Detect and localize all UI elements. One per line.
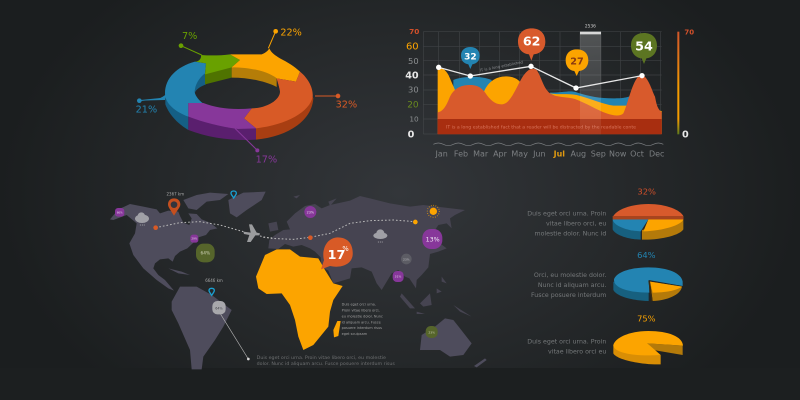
south america [172, 287, 232, 369]
africa note: Proin vitae libero orci, [342, 308, 380, 312]
sun icon [427, 205, 439, 217]
pie 2: Nunc id aliquam arcu. [538, 282, 606, 289]
cloud icon [135, 212, 149, 228]
orange series [438, 68, 662, 134]
grid [423, 32, 662, 134]
new zealand [474, 358, 487, 367]
right labels: 70 [684, 28, 694, 36]
origin dot [153, 225, 158, 230]
pie 3: vitae libero orci eu [548, 349, 606, 356]
column cap [580, 32, 601, 34]
badge 23%: 23% [307, 210, 314, 214]
cloud icon: ••• [139, 224, 145, 228]
bubble 54 [631, 33, 657, 64]
y axis labels [405, 27, 419, 140]
badge 64% grey: 64% [215, 306, 223, 310]
bubble 32 [461, 47, 480, 69]
right labels [682, 28, 694, 141]
australia [420, 318, 472, 357]
month labels: Feb [454, 149, 468, 158]
month labels: Mar [473, 149, 489, 158]
badge 64% grey [212, 301, 226, 314]
pie 3: 75% [637, 314, 656, 324]
donut chart [136, 28, 357, 166]
leader lines [139, 31, 338, 150]
pie 1 [527, 186, 683, 240]
pin blue top [231, 191, 236, 198]
badge 31%: 31% [395, 275, 401, 279]
donut labels: 21% [136, 105, 157, 116]
month labels: Jun [532, 149, 546, 158]
route dots [308, 220, 418, 240]
badge 23% green: 23% [428, 330, 435, 334]
bubble 62: 62 [523, 34, 540, 49]
highlight column [580, 32, 601, 134]
column label: 2536 [585, 23, 596, 29]
badge 64% green [196, 244, 215, 262]
badge 23% green [426, 326, 438, 338]
pie charts [527, 186, 683, 364]
caribbean [168, 268, 190, 275]
y axis labels: 60 [406, 42, 419, 53]
badge 29%: 29% [191, 237, 198, 241]
pie 1: vitae libero orci, eu [546, 221, 606, 228]
flight path [260, 220, 415, 239]
bubble 62 [518, 28, 545, 61]
africa note: Duis eget orci urna. [342, 302, 376, 306]
y axis labels: 40 [405, 70, 419, 81]
bubble 27 [566, 49, 588, 76]
month labels: Dec [649, 149, 664, 158]
africa note [342, 302, 383, 336]
donut labels: 7% [182, 31, 197, 42]
donut labels: 32% [336, 99, 357, 110]
bottom note: Duis eget orci urna. Proin vitae libero orci, eu molestie [257, 355, 386, 361]
cloud icon: ••• [377, 240, 383, 244]
flight path [156, 222, 300, 239]
y axis labels: 50 [408, 56, 419, 66]
month labels: Jan [435, 149, 448, 158]
world map: americas [110, 191, 300, 369]
bottom note [257, 355, 395, 367]
pie 1: molestie dolor. Nunc id [535, 231, 606, 238]
donut labels [136, 28, 357, 166]
pie 2: Fusce posuere interdum [531, 292, 606, 299]
badge 23% [304, 206, 316, 218]
bottom note: dolor. Nunc id aliquam arcu. Fusce posuere interdum risus [257, 361, 395, 367]
arctic islands [183, 193, 228, 210]
badge 64% green: 64% [201, 251, 210, 257]
cloud icon [373, 229, 387, 244]
trend line [436, 64, 645, 91]
month labels [435, 149, 664, 158]
pin blue [209, 288, 214, 295]
month labels: Oct [630, 149, 644, 158]
africa note: id aliquam arcu. Fusce [342, 320, 381, 324]
badge 23% grey [401, 254, 412, 264]
right scale bar [677, 32, 679, 134]
pie 1: 32% [637, 186, 656, 196]
pie 2: 64% [637, 250, 656, 260]
badge 13% [422, 229, 442, 249]
blue series [453, 77, 633, 134]
donut labels: 22% [280, 28, 302, 39]
bubble 32: 32 [464, 52, 477, 62]
bubble 54: 54 [635, 39, 653, 54]
badge 31% [393, 271, 404, 282]
wave axis [433, 143, 663, 146]
pie 3 [527, 314, 683, 364]
badge 29% [190, 235, 198, 243]
badge 66% [115, 208, 124, 217]
callout 17%: 17 [328, 247, 345, 262]
band [438, 119, 662, 134]
month labels: May [511, 149, 528, 158]
area chart [405, 23, 694, 158]
month labels: Jul [553, 149, 565, 158]
plane icon [243, 224, 260, 242]
iceland and uk [268, 195, 337, 232]
madagascar [333, 321, 341, 337]
red series [438, 69, 662, 134]
month labels: Aug [571, 149, 586, 158]
badge 66%: 66% [117, 210, 123, 214]
southeast asia islands [400, 277, 472, 317]
y axis labels: 0 [408, 129, 415, 140]
pin orange [168, 198, 180, 216]
band text: IT is a long established fact that a reader will be distracted by the readable conte [446, 124, 636, 130]
africa [256, 249, 343, 350]
africa note: eu molestie dolor. Nunc [342, 314, 383, 318]
y axis labels: 70 [409, 27, 419, 36]
y axis labels: 30 [408, 85, 419, 95]
line note: IT is a long established [479, 59, 524, 73]
africa note: posuere interdum risus [342, 326, 382, 330]
donut labels: 17% [256, 155, 277, 166]
callout line [221, 314, 250, 360]
pie 2: Orci, eu molestie dolor. [534, 272, 606, 279]
y axis labels: 20 [407, 100, 419, 110]
distance label 2: 6646 km [205, 278, 223, 283]
world map: eurasia and africa [256, 195, 487, 367]
month labels: Apr [493, 149, 508, 158]
eurasia [268, 196, 465, 290]
pie 3: Duis eget orci urna. Proin [527, 339, 606, 346]
month labels: Sep [591, 149, 606, 158]
bubble 27: 27 [570, 56, 584, 67]
pie 2 [531, 250, 683, 301]
right labels: 0 [682, 130, 689, 141]
month labels: Now [609, 149, 627, 158]
north america [110, 204, 217, 291]
distance label: 2367 km [167, 191, 184, 196]
greenland [228, 192, 266, 217]
bottom band [0, 368, 800, 400]
badge 13%: 13% [426, 236, 440, 243]
callout 17%: % [342, 245, 349, 253]
africa note: eget scuipsam [342, 332, 368, 336]
pie 1: Duis eget orci urna. Proin [527, 210, 606, 217]
callout 17% [321, 237, 353, 269]
y axis labels: 10 [409, 114, 419, 123]
badge 23% grey: 23% [403, 257, 410, 261]
